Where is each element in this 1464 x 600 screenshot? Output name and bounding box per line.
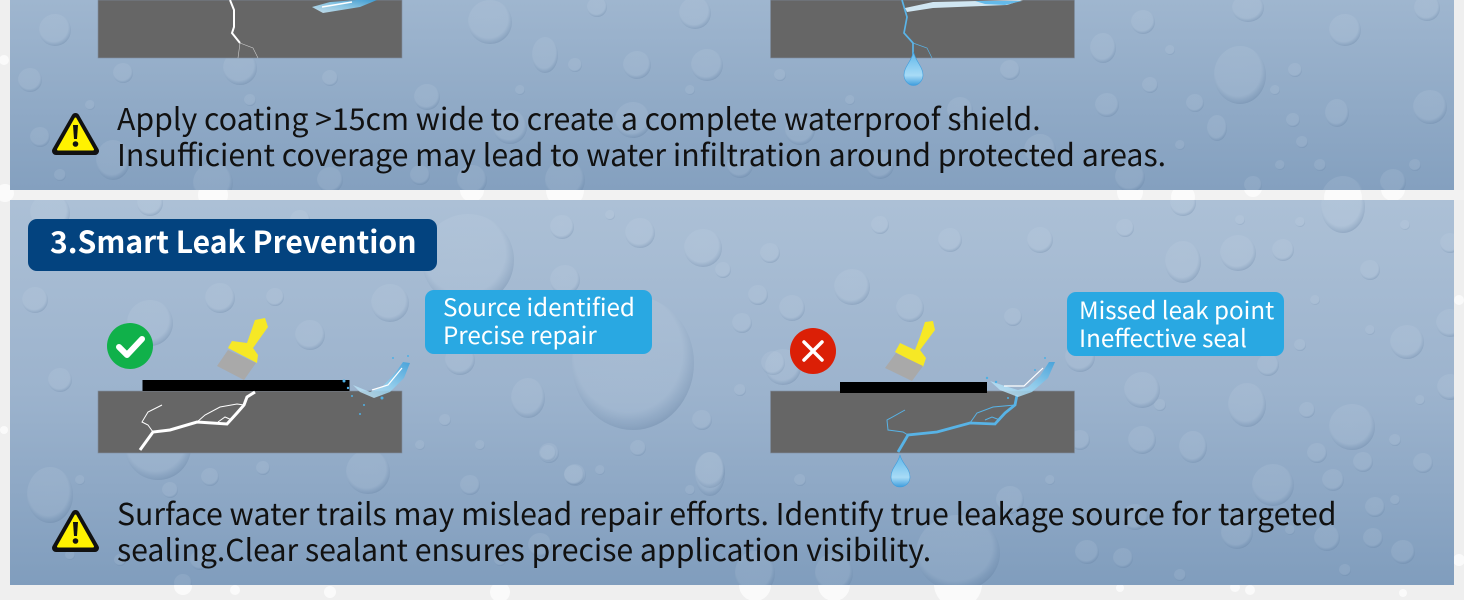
leak path <box>887 395 1017 452</box>
icon: warning triangle <box>52 510 99 552</box>
icon: green check <box>107 323 153 369</box>
sealant bar <box>142 380 350 391</box>
substrate <box>98 391 402 453</box>
warning text: Surface water trails may mislead repair efforts. Identify true leakage source for targeted <box>117 490 1336 534</box>
warning text <box>117 490 1336 570</box>
diagram: upper left coated substrate with crack <box>98 0 402 58</box>
callout: wrong: Missed leak point <box>1079 291 1274 326</box>
callout: correct: Source identified <box>443 288 635 323</box>
icon: yellow brush <box>217 318 268 380</box>
diagram: wrong repair <box>770 321 1075 488</box>
heading: section 3: 3.Smart Leak Prevention <box>50 218 417 262</box>
callout: wrong: Ineffective seal <box>1079 319 1247 354</box>
substrate <box>770 391 1074 453</box>
warning note: leak source <box>52 490 1336 570</box>
icon: red cross <box>790 328 836 374</box>
warning text <box>117 95 1166 175</box>
callout: correct <box>425 290 652 354</box>
panel: upper section background <box>10 0 1454 190</box>
warning text: Insufficient coverage may lead to water infiltration around protected areas. <box>117 131 1166 175</box>
water splash <box>342 355 410 415</box>
callout: correct: Precise repair <box>443 316 597 351</box>
icon: yellow brush <box>885 321 935 381</box>
callout: wrong <box>1067 292 1284 356</box>
warning text: Apply coating >15cm wide to create a complete waterproof shield. <box>117 95 1041 139</box>
diagram: correct repair <box>98 318 410 454</box>
icon: water drop <box>891 455 910 487</box>
warning note: coverage <box>52 95 1166 175</box>
diagram: upper right substrate with leak <box>770 0 1075 86</box>
panel: lower section background <box>10 181 1464 595</box>
water splash <box>986 357 1055 399</box>
sealant bar <box>840 382 987 393</box>
warning text: sealing.Clear sealant ensures precise application visibility. <box>117 526 931 570</box>
icon: warning triangle <box>52 113 99 155</box>
crack <box>140 392 255 450</box>
